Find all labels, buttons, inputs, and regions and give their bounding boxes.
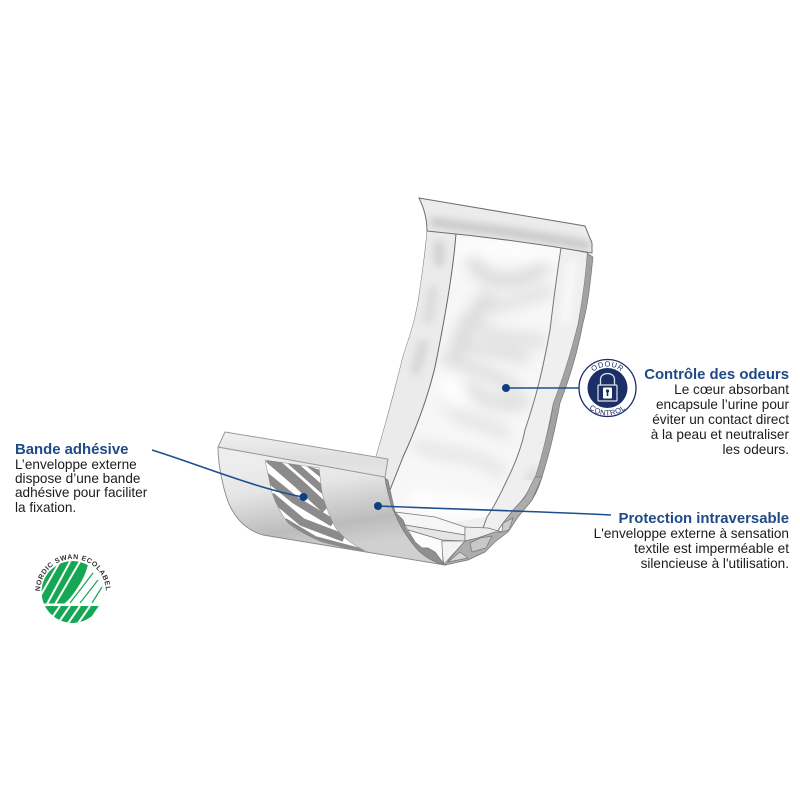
text block: adhesive strip bbox=[15, 442, 148, 515]
product illustration: absorbent pad bbox=[218, 198, 595, 565]
text block: impermeable protection: Protection intraversable bbox=[619, 511, 789, 527]
icon: nordic swan ecolabel bbox=[35, 554, 111, 623]
icon: odour control badge: CONTROL bbox=[590, 406, 626, 416]
text block: impermeable protection bbox=[594, 511, 789, 571]
text block: odour control: éviter un contact direct bbox=[652, 412, 789, 427]
absorbent core shading bbox=[395, 234, 560, 522]
icon: odour control badge: ODOUR bbox=[592, 361, 624, 372]
back outer edge bbox=[503, 253, 593, 523]
left side strip shading bbox=[376, 232, 456, 478]
front top flap bbox=[218, 432, 388, 477]
callout line: adhesive strip bbox=[152, 450, 308, 501]
text block: odour control: à la peau et neutraliser bbox=[651, 427, 789, 442]
inner stitching lines bbox=[390, 233, 456, 490]
icon: nordic swan ecolabel: NORDIC SWAN ECOLABEL bbox=[35, 554, 111, 591]
text block: odour control: Le cœur absorbant bbox=[674, 382, 789, 397]
text block: impermeable protection: silencieuse à l'utilisation. bbox=[641, 556, 789, 571]
text block: adhesive strip: Bande adhésive bbox=[15, 442, 128, 458]
text block: adhesive strip: dispose d’une bande bbox=[15, 471, 140, 486]
text block: impermeable protection: textile est imperméable et bbox=[634, 541, 789, 556]
inner surface bbox=[376, 231, 587, 565]
pleats at the fold bbox=[395, 477, 542, 565]
text block: adhesive strip: adhésive pour faciliter bbox=[15, 485, 148, 500]
right side strip shading bbox=[502, 248, 587, 523]
text block: adhesive strip: la fixation. bbox=[15, 500, 76, 515]
callout line: impermeable shell bbox=[374, 502, 611, 515]
text block: impermeable protection: L'enveloppe externe à sensation bbox=[594, 526, 789, 541]
icon: odour control badge bbox=[578, 358, 637, 418]
text block: odour control: encapsule l’urine pour bbox=[656, 397, 789, 412]
shell cut edge band bbox=[385, 478, 445, 565]
text block: adhesive strip: L’enveloppe externe bbox=[15, 457, 137, 472]
back top flap bbox=[419, 198, 592, 253]
adhesive strip bbox=[263, 458, 368, 552]
front outer shell bbox=[218, 447, 445, 565]
text block: odour control: les odeurs. bbox=[722, 442, 789, 457]
callout line: odour core bbox=[502, 384, 580, 392]
text block: odour control bbox=[644, 367, 789, 457]
text block: odour control: Contrôle des odeurs bbox=[644, 367, 789, 383]
